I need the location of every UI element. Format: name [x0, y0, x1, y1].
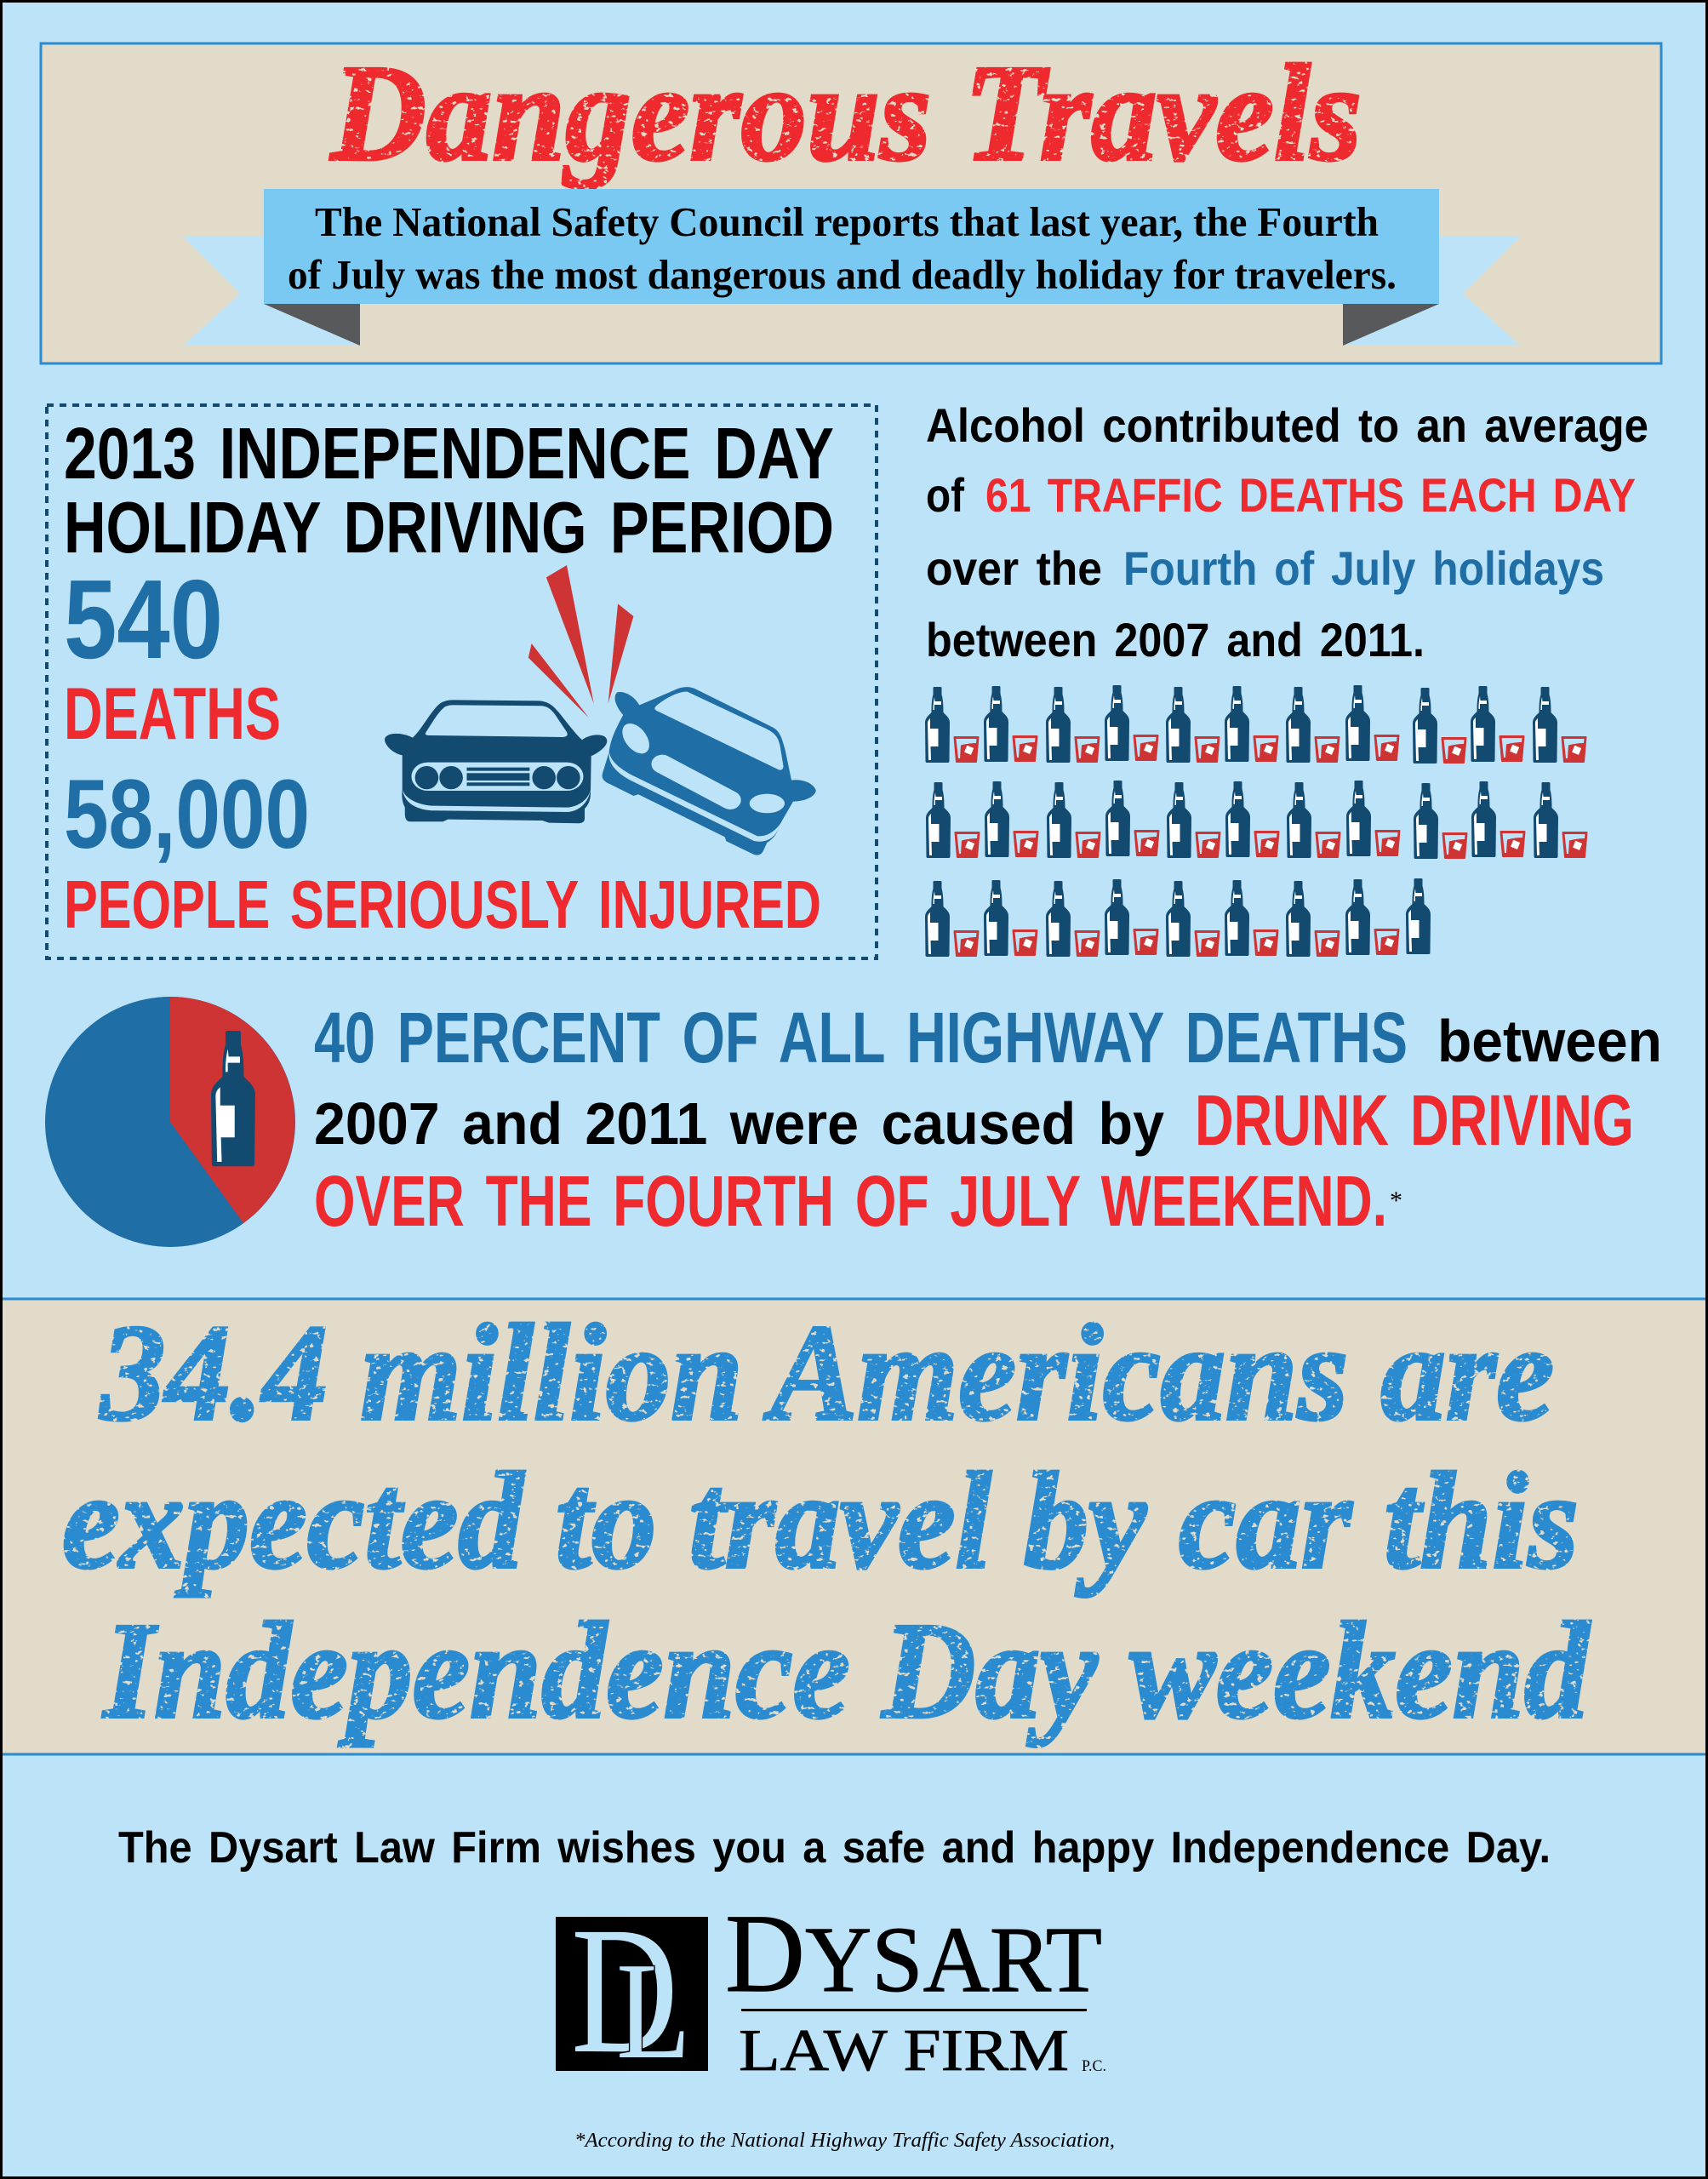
logo: Dysart Law Firm — [556, 1890, 1106, 2091]
script statement: Independence Day weekend — [102, 1595, 1591, 1747]
text block: 40 percent statement: 2007 and 2011 were caused by — [314, 1090, 1164, 1157]
ribbon: centre — [264, 189, 1439, 304]
sparks — [528, 565, 633, 718]
ribbon: right fold — [1343, 304, 1439, 346]
heading: 2013 INDEPENDENCE DAY — [64, 414, 834, 495]
script statement: 34.4 million Americans are — [99, 1297, 1554, 1450]
row 3 — [925, 878, 1431, 957]
text block: alcohol statistic: over the — [926, 541, 1102, 595]
text block: alcohol statistic — [926, 398, 1648, 666]
script statement — [62, 1297, 1591, 1747]
label: deaths: DEATHS — [64, 673, 281, 755]
heading — [64, 414, 834, 569]
ribbon: right tail — [1343, 237, 1520, 346]
ribbon: left tail — [183, 237, 360, 346]
wordmark: Dysart: DYSART — [725, 1890, 1102, 2016]
car: front view — [385, 700, 607, 823]
panel: title banner — [41, 37, 1661, 363]
panel: 34.4 million Americans band — [1, 1297, 1707, 1754]
ribbon: left fold — [264, 304, 360, 346]
wordmark: Law Firm: LAW FIRM — [739, 2018, 1069, 2084]
text block: 40 percent statement: 40 PERCENT OF ALL HIGHWAY DEATHS — [314, 998, 1408, 1078]
logo mark: DL monogram: D — [571, 1890, 678, 2091]
wordmark: P.C.: P.C. — [1082, 2057, 1106, 2075]
text block: alcohol statistic: of — [926, 468, 964, 522]
text block: 40 percent statement — [314, 998, 1662, 1241]
closing message: The Dysart Law Firm wishes you a safe and happy Independence Day. — [118, 1823, 1551, 1873]
ribbon text — [288, 198, 1397, 298]
script statement: expected to travel by car this — [62, 1445, 1579, 1598]
ribbon text: The National Safety Council reports that last year, the Fourth — [315, 198, 1379, 245]
ribbon text: of July was the most dangerous and deadly holiday for travelers. — [288, 251, 1397, 298]
icon: bottle on pie — [211, 1031, 255, 1166]
heading: HOLIDAY DRIVING PERIOD — [64, 488, 834, 569]
panel: holiday driving period statistics — [47, 405, 877, 958]
car: tilted — [603, 687, 816, 855]
footnote: *According to the National Highway Traffic Safety Association, — [574, 2130, 1115, 2152]
text block: 40 percent statement: * — [1390, 1187, 1402, 1215]
title: Dangerous Travels — [329, 37, 1362, 190]
pie chart: 40 percent — [45, 997, 295, 1247]
wordmark rule — [741, 2009, 1087, 2011]
text block: alcohol statistic: Fourth of July holidays — [1123, 541, 1604, 595]
number: 58,000: 58,000 — [64, 760, 310, 869]
logo mark: DL monogram: L — [616, 1935, 691, 2088]
text block: alcohol statistic: Alcohol contributed to an average — [926, 398, 1648, 452]
row 1 — [925, 685, 1586, 764]
label: people seriously injured: PEOPLE SERIOUSLY INJURED — [64, 866, 821, 942]
pictogram: 61 bottles and glasses — [925, 685, 1588, 957]
row 2 — [926, 781, 1588, 859]
number: 540: 540 — [64, 557, 223, 682]
text block: 40 percent statement: between — [1437, 1008, 1662, 1074]
icon: car crash — [385, 565, 816, 855]
text block: alcohol statistic: between 2007 and 2011. — [926, 613, 1425, 666]
